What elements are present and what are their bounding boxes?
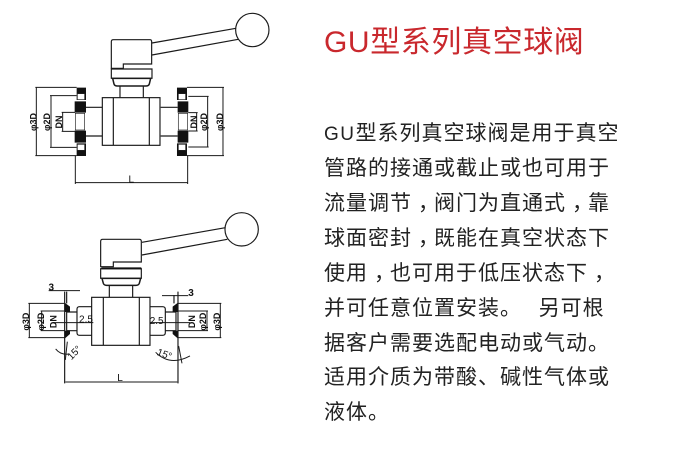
dimension labels — [21, 283, 222, 384]
dimension labels: φ2D — [36, 312, 46, 331]
left and right clamp faces — [65, 292, 178, 383]
dimension labels: DN — [187, 315, 197, 328]
text block: description: 适用介质为带酸、碱性气体或 — [324, 366, 610, 389]
valve body — [85, 98, 178, 145]
dimension labels: 3 — [49, 283, 55, 294]
dimension labels: φ3D — [29, 113, 39, 131]
text block: description: 使用 ，也可用于低压状态下 ， — [324, 262, 616, 285]
handle and ball knob — [152, 13, 269, 55]
text block: description: 流量调节 ，阀门为直通式 ，靠 — [324, 192, 610, 215]
title: GU型系列真空球阀 — [324, 26, 584, 59]
dimension labels: L — [117, 373, 123, 384]
dimension labels: L — [129, 174, 135, 185]
dimension labels: 2.5 — [79, 315, 93, 326]
left flange — [75, 88, 86, 156]
valve body — [67, 297, 176, 345]
text block: description: 管路的接通或截止或也可用于 — [324, 157, 610, 180]
dimension labels: φ2D — [198, 312, 208, 331]
dimension labels: φ3D — [212, 312, 222, 331]
dimension lines — [35, 87, 224, 184]
actuator head — [111, 40, 152, 97]
dimension labels: φ2D — [199, 113, 209, 131]
dimension labels: DN — [189, 115, 199, 128]
dimension labels: 3 — [188, 288, 194, 299]
handle and ball knob — [142, 213, 258, 255]
text block: description: 并可任意位置安装。 另可根 — [324, 297, 605, 320]
dimension labels: DN — [49, 315, 59, 328]
text block: description: 球面密封 ，既能在真空状态下 — [324, 227, 610, 250]
text block: description: 据客户需要选配电动或气动。 — [324, 332, 610, 355]
dimension lines — [28, 291, 221, 382]
dimension labels: φ3D — [215, 113, 225, 131]
dimension labels: 15° — [66, 344, 84, 362]
dimension labels: 15° — [155, 347, 173, 363]
text block: description: GU型系列真空球阀是用于真空 — [324, 122, 620, 145]
dimension labels: φ2D — [42, 113, 52, 131]
dimension labels: φ3D — [21, 312, 31, 331]
right flange — [177, 88, 188, 156]
dimension labels: DN — [54, 115, 64, 128]
text block: description: 液体。 — [324, 401, 390, 424]
dimension labels: 2.5 — [150, 316, 164, 327]
dimension labels — [29, 113, 225, 185]
actuator head — [101, 239, 141, 297]
